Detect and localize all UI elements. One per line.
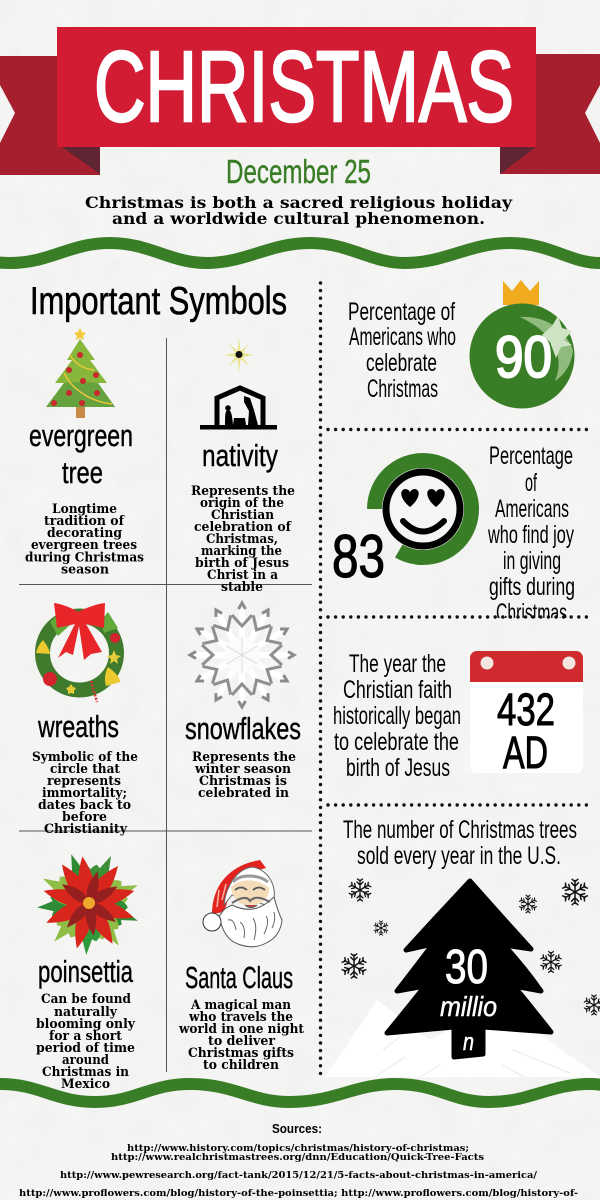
banner left ribbon tail: [0, 56, 100, 175]
symbol: santa claus: [178, 860, 304, 1073]
icon: santa claus: [203, 860, 282, 947]
description: evergreen tree: tradition of: [44, 514, 125, 529]
icon: black tree with 30 million: 30: [445, 941, 488, 994]
description: nativity: Christ in a: [207, 568, 279, 583]
label: wreaths: wreaths: [37, 709, 119, 744]
description: poinsettia: for a short: [49, 1029, 122, 1044]
icon: calendar 432 AD: [470, 651, 583, 778]
intro text: and a worldwide cultural phenomenon.: [112, 209, 485, 228]
intro text: Christmas is both a sacred religious holiday: [85, 193, 513, 212]
description: poinsettia: blooming only: [36, 1017, 135, 1032]
description: santa claus: A magical man: [190, 998, 291, 1013]
bottom wave divider: [0, 1084, 600, 1102]
description: evergreen tree: Longtime: [52, 502, 117, 517]
description: snowflakes: celebrated in: [198, 786, 290, 801]
sources heading: Sources:: [272, 1122, 322, 1136]
description: evergreen tree: [25, 502, 144, 578]
panel: year celebration began: [333, 650, 583, 782]
icon: calendar 432 AD: 432: [497, 684, 555, 735]
stat caption: year: historically began: [333, 702, 461, 730]
banner main panel: [57, 27, 536, 147]
sources list: http://www.pewresearch.org/fact-tank/2015/12/21/5-facts-about-christmas-in-america/: [60, 1170, 537, 1181]
icon: calendar 432 AD: AD: [503, 727, 548, 778]
description: santa claus: to children: [203, 1058, 280, 1073]
horizontal dotted divider 1: [328, 428, 587, 431]
description: wreaths: before: [62, 810, 107, 825]
label: nativity: nativity: [202, 438, 278, 473]
description: nativity: origin of the: [200, 496, 284, 511]
stat caption: year: to celebrate the: [334, 728, 459, 756]
horizontal dotted divider 3: [328, 803, 587, 807]
label: evergreen tree: [29, 418, 133, 490]
icon: ornament with 90: 90: [495, 325, 552, 390]
title banner: [0, 27, 600, 175]
stat caption: celebrate: Christmas: [367, 375, 438, 403]
description: evergreen tree: evergreen trees: [31, 538, 137, 553]
icon: black tree with 30 million: [387, 881, 551, 1057]
description: evergreen tree: decorating: [47, 526, 122, 541]
description: poinsettia: Mexico: [61, 1077, 110, 1092]
description: santa claus: to deliver: [208, 1034, 275, 1049]
symbol: wreaths: [32, 603, 138, 837]
description: wreaths: represents: [47, 774, 121, 789]
symbol: evergreen tree: [25, 328, 144, 578]
stat caption: joy: in giving: [503, 547, 561, 575]
label: santa claus: Santa Claus: [185, 960, 293, 995]
banner right ribbon tail: [500, 54, 600, 174]
description: wreaths: dates back to: [38, 798, 131, 813]
description: wreaths: Symbolic of the: [32, 750, 138, 765]
panel: percent who celebrate: [348, 280, 574, 408]
description: poinsettia: naturally: [54, 1005, 117, 1020]
symbol: snowflakes: [185, 603, 301, 801]
icon: ornament with 90: [470, 280, 574, 408]
description: nativity: marking the: [201, 544, 282, 559]
description: nativity: [191, 484, 295, 595]
icon: falling snowflakes: [342, 879, 600, 1015]
description: poinsettia: around: [62, 1053, 109, 1068]
description: santa claus: who travels the: [188, 1010, 293, 1025]
description: poinsettia: Can be found: [41, 992, 131, 1007]
icon: nativity star: [224, 338, 254, 372]
icon: heart eyes smiley: [382, 468, 464, 550]
intro text: [85, 193, 513, 228]
panel: percent who find joy: [332, 442, 575, 627]
icon: black tree with 30 million: millio: [440, 991, 497, 1022]
stat caption: year: birth of Jesus: [346, 754, 450, 782]
description: snowflakes: winter season: [194, 762, 292, 777]
symbol: nativity: [191, 338, 295, 595]
icon: nativity stable: [200, 388, 277, 430]
stat caption: year: The year the: [349, 650, 446, 678]
symbol: poinsettia: [36, 850, 142, 1092]
sources list: [19, 1143, 578, 1200]
stat caption: year: Christian faith: [343, 676, 452, 704]
description: nativity: birth of Jesus: [195, 556, 289, 571]
description: santa claus: Christmas gifts: [188, 1046, 294, 1061]
label: evergreen tree: evergreen: [29, 418, 133, 453]
donut chart 83 percent: [375, 461, 471, 557]
stat caption: celebrate: Percentage of: [348, 298, 455, 326]
panel: important symbols: [19, 280, 312, 1092]
sources list: http://www.realchristmastrees.org/dnn/Education/Quick-Tree-Facts: [111, 1152, 484, 1163]
symbols grid lines: [19, 338, 312, 1072]
description: evergreen tree: during Christmas: [25, 550, 144, 566]
description: wreaths: immortality;: [42, 786, 127, 801]
stat caption: trees sold: [343, 816, 577, 870]
description: evergreen tree: season: [61, 562, 110, 578]
dotted column divider: [319, 283, 322, 1075]
date heading: December 25: [226, 153, 371, 190]
stat caption: celebrate: Americans who: [349, 323, 456, 351]
label: poinsettia: poinsettia: [38, 954, 134, 989]
description: nativity: stable: [221, 580, 263, 595]
icon: black tree with 30 million: n: [463, 1029, 474, 1056]
stat number 83: 83: [332, 523, 385, 590]
description: nativity: celebration of: [194, 520, 292, 535]
symbols heading: Important Symbols: [30, 280, 287, 323]
description: snowflakes: Represents the: [192, 750, 296, 765]
icon: wreath: [36, 603, 121, 702]
stat caption: year: [333, 650, 461, 782]
panel: trees sold: [342, 816, 600, 1057]
banner right fold: [500, 147, 536, 174]
label: snowflakes: snowflakes: [185, 711, 301, 746]
description: wreaths: [32, 750, 138, 837]
banner left fold: [62, 147, 100, 174]
horizontal dotted divider 2: [328, 615, 587, 619]
stat caption: joy: of: [525, 469, 537, 497]
icon: evergreen tree: [46, 328, 115, 418]
description: santa claus: world in one night: [178, 1022, 304, 1037]
description: snowflakes: Christmas is: [199, 774, 287, 789]
top wave divider: [0, 243, 600, 263]
description: poinsettia: period of time: [36, 1041, 135, 1056]
description: poinsettia: [36, 992, 135, 1092]
description: nativity: Christmas,: [206, 532, 278, 547]
icon: poinsettia: [36, 850, 142, 956]
description: santa claus: [178, 998, 304, 1073]
description: nativity: Christian: [211, 508, 274, 523]
description: wreaths: circle that: [50, 762, 120, 777]
stat caption: celebrate: celebrate: [366, 349, 437, 377]
stat caption: joy: [487, 442, 575, 627]
description: wreaths: Christianity: [44, 822, 127, 837]
icon: large snowflake: [190, 603, 294, 707]
mountains scene behind tree: [326, 1000, 600, 1077]
description: snowflakes: [192, 750, 296, 801]
sources list: http://www.history.com/topics/christmas/history-of-christmas;: [127, 1143, 469, 1154]
sources list: http://www.proflowers.com/blog/history-of-the-poinsettia; http://www.proflowers.com/blog/history-of-: [19, 1188, 578, 1199]
description: poinsettia: Christmas in: [42, 1065, 130, 1080]
stat caption: celebrate: [348, 298, 456, 403]
sources: [19, 1122, 578, 1200]
description: nativity: Represents the: [191, 484, 295, 499]
label: evergreen tree: tree: [62, 455, 103, 490]
